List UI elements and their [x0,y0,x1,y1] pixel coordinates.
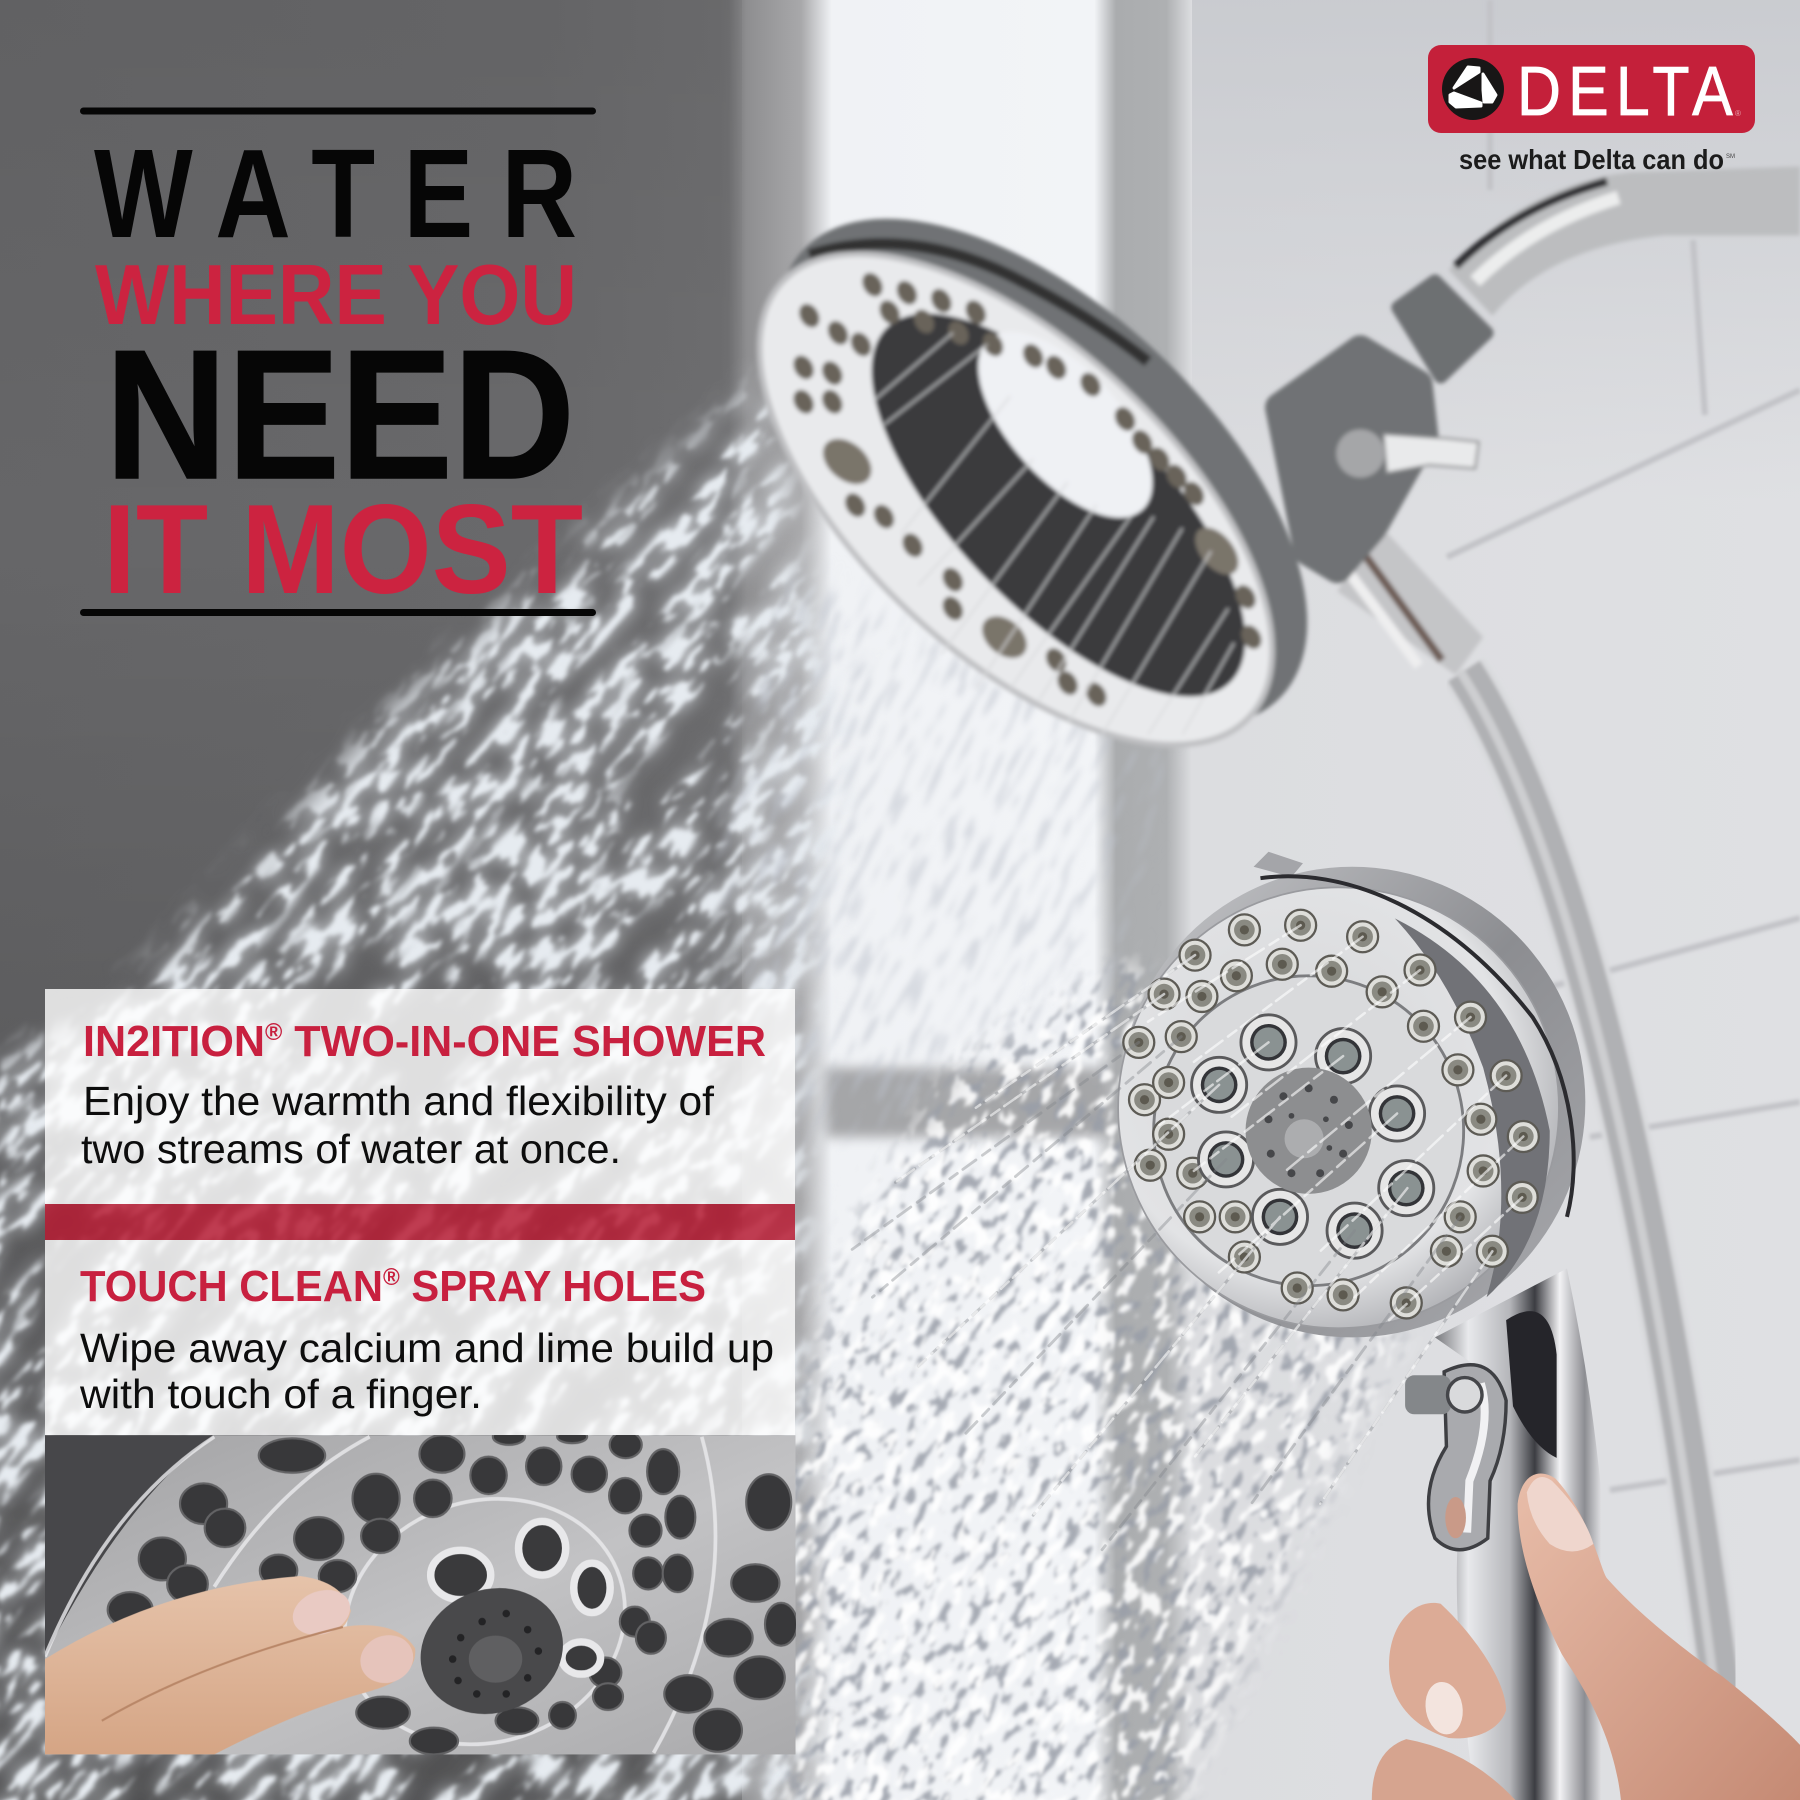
logo wordmark: DELTA [1517,52,1733,130]
water jets from nozzles [849,925,1523,1550]
large ringed holes [431,1521,610,1674]
spray: handheld fan white droplets [772,954,1402,1800]
body: Touch Clean line 1: Wipe away calcium and lime build up [80,1325,774,1371]
title block [80,108,596,620]
rim dark line [1260,876,1574,1217]
heading: Touch Clean: ® [383,1264,400,1291]
dark shell corner [45,1435,214,1656]
body: Touch Clean line 2: with touch of a finger. [79,1371,482,1417]
registered mark: ® [1735,109,1741,118]
outer nozzles [1123,910,1539,1318]
inner ring [1154,976,1464,1286]
service mark: SM [1726,154,1735,160]
index finger and palm [1518,1474,1800,1800]
title top rule [80,108,596,114]
index fingernail [1527,1477,1593,1551]
panel lower translucent background [45,1240,795,1435]
shell dark top edge [809,244,1148,362]
handle [1435,1268,1601,1800]
title: IT MOST: IT MOST [103,478,583,620]
heading: Touch Clean: SPRAY HOLES [400,1262,706,1311]
spray: handheld fan grey droplets [780,966,1408,1800]
inset photo: finger wiping spray holes [45,1429,797,1780]
panel upper translucent background [45,989,795,1204]
ring nozzles [789,269,1266,710]
water lines across interior [872,333,1234,735]
tagline: see what Delta can do [1459,144,1724,175]
handheld shower [849,852,1800,1800]
centre spray disc [420,1588,563,1714]
title: WATER: WATER [94,123,577,264]
see-through centre [948,303,1183,547]
arm [1449,166,1800,316]
face [1118,887,1559,1328]
mount body [1280,281,1487,568]
connector to hose [1337,522,1483,675]
back shell [690,128,1395,818]
head top button [1254,852,1303,877]
spray: upper head over white window [714,591,1120,1108]
red divider band [45,1204,795,1240]
dark interior [813,256,1304,754]
finger [45,1576,420,1754]
upper shower head [677,128,1800,830]
title bottom rule [80,609,596,616]
spray: upper head left fan [0,376,826,1800]
centre spray disc [1246,1068,1372,1194]
title: WHERE YOU: WHERE YOU [95,248,577,343]
heading: In2ition: ® [265,1019,283,1046]
face ring [677,168,1355,830]
head rim [1119,867,1585,1337]
body: In2ition line 2: two streams of water at once. [81,1126,621,1172]
logo mark [1442,58,1504,120]
title: NEED: NEED [105,311,575,517]
middle fingernail [1421,1679,1467,1737]
large nozzles [1192,1015,1434,1258]
hand [1372,1474,1800,1800]
chrome arcs [45,1437,715,1780]
middle finger [1389,1603,1506,1738]
hose [1460,671,1722,1700]
dark face reflection [1395,918,1550,1297]
logo badge [1428,45,1755,133]
logo [1428,45,1755,175]
heading: In2ition: IN2ITION [83,1017,269,1066]
feature panel [45,989,797,1780]
lower finger [1372,1739,1515,1800]
lever and pull button [1405,1365,1506,1550]
spray holes [108,1429,797,1754]
heading: In2ition: TWO-IN-ONE SHOWER [282,1017,766,1066]
body: In2ition line 1: Enjoy the warmth and flexibility of [83,1078,715,1124]
handle reflection [1506,1311,1557,1458]
heading: Touch Clean: TOUCH CLEAN [80,1262,399,1311]
